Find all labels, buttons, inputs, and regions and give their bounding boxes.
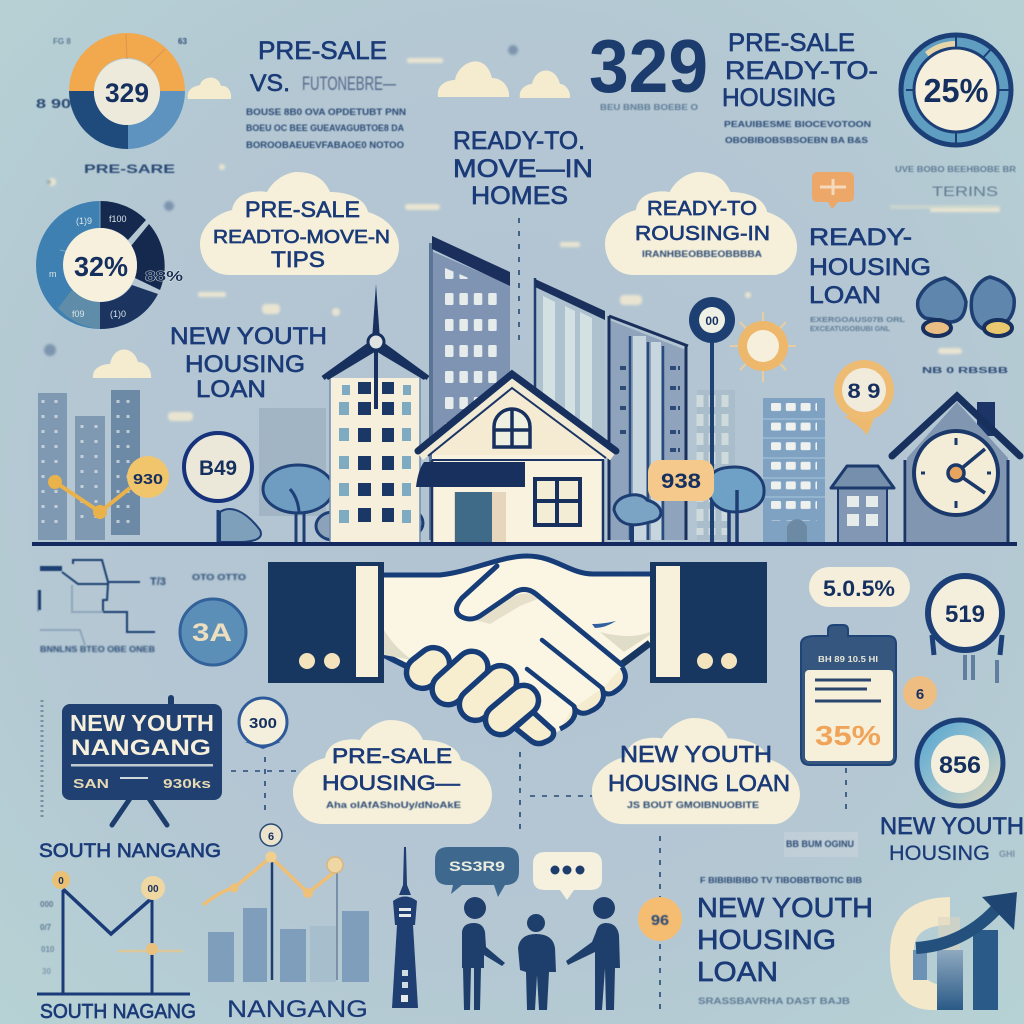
- heading: ready housing loan: HOUSING: [809, 254, 931, 281]
- person left: [462, 897, 505, 1010]
- right cuff: [650, 562, 767, 683]
- heading: pre-sale vs: [250, 37, 396, 97]
- donut chart: 32%: (1)0: [110, 309, 126, 319]
- cloud: pre-sale housing: [293, 720, 492, 824]
- heading: ready-to-move-in homes: [453, 127, 593, 210]
- heading: pre-sale vs: FUTONEBRE—: [302, 74, 396, 95]
- badge: 96: 96: [651, 912, 669, 929]
- heading: pre-sale ready-to housing: HOUSING: [722, 84, 836, 112]
- left hand fingers: [400, 641, 554, 744]
- badge: 96: [638, 897, 682, 941]
- right hand fingers: [527, 640, 625, 729]
- small label: NB 0 RBSBB: [922, 366, 1008, 375]
- badge: 300: [239, 698, 287, 749]
- heading: new youth housing loan bottom: [697, 876, 873, 1006]
- big number 329: BEU BNBB BOEBE O: [600, 103, 698, 112]
- building: tower with wind turbine: [323, 284, 428, 543]
- donut chart: 32%: f09: [72, 309, 85, 319]
- signboard: new youth nangang: NANGANG: [71, 735, 211, 760]
- line chart: gold trend: 930: [133, 471, 163, 488]
- heading: ready housing loan: LOAN: [809, 282, 881, 309]
- vertical tick strip: [40, 700, 44, 820]
- small label box: BB BUM OGINU: [786, 839, 854, 849]
- building: tall tower A: [429, 236, 510, 540]
- donut chart: 25%: [901, 35, 1011, 145]
- heading: new youth housing loan bottom: LOAN: [697, 956, 778, 987]
- pill badge: 939: [648, 460, 714, 501]
- dashed connectors: [231, 752, 846, 1010]
- heading: new youth housing loan: NEW YOUTH: [170, 323, 327, 350]
- cloud: ready-to housing-in: ROUSING-IN: [635, 223, 770, 245]
- donut chart: 32%: f100: [109, 214, 127, 224]
- building: small house: [831, 466, 894, 543]
- dashed connector: [518, 218, 520, 340]
- heading: new youth housing loan: [170, 323, 327, 403]
- badge: 300: 300: [249, 715, 277, 732]
- icon: abstract keys: [918, 277, 1014, 336]
- heading: ready housing loan: EXCEATUGOBUBI GNL: [810, 326, 891, 333]
- cloud: pre-sale tips: PRE-SALE: [245, 197, 360, 222]
- icon: observation tower: [392, 847, 418, 1008]
- donut chart: 32%: [36, 201, 183, 329]
- map diagram: OTO OTTO: [192, 573, 246, 582]
- pin badge: 89: [834, 360, 894, 436]
- line chart: south nangang: 0/7: [40, 923, 52, 932]
- badge: 3A: [180, 599, 246, 665]
- heading: pre-sale ready-to housing: PRE-SALE: [728, 29, 855, 57]
- building: faded background: [259, 408, 326, 516]
- donut chart: 329: [36, 33, 187, 149]
- pill badge: 939: 938: [661, 470, 701, 493]
- ground line: [32, 542, 1017, 546]
- badge: 6: [903, 676, 937, 710]
- cloud: new youth housing loan: HOUSING LOAN: [608, 770, 790, 796]
- heading: new youth housing right: HOUSING: [889, 842, 990, 865]
- signboard: new youth nangang: NEW YOUTH: [70, 710, 214, 736]
- text block: terms: TERINS: [932, 183, 998, 199]
- clipboard: 35%: 35%: [815, 720, 881, 751]
- icon: sun: [730, 312, 796, 382]
- pill: 5.0.5%: 5.0.5%: [823, 576, 895, 601]
- clipboard: 35%: BH 89 10.5 HI: [818, 655, 878, 664]
- map diagram: T/3: [150, 576, 166, 588]
- round attic window: [494, 409, 530, 447]
- main house: [416, 374, 616, 543]
- line chart: south nangang: 00: [147, 884, 159, 895]
- heading: ready housing loan: EXERGOAUS07B ORL: [810, 317, 906, 324]
- cloud: pre-sale tips: [200, 172, 399, 275]
- bar chart: nangang: [203, 824, 369, 982]
- building: faded mid tower: [697, 390, 735, 540]
- lollipop sign: 00: [705, 314, 719, 328]
- heading: new youth housing right: NEW YOUTH: [880, 813, 1024, 840]
- house with clock: [892, 396, 1020, 543]
- line chart: south nangang: [37, 871, 190, 994]
- speech bubble: blue: [435, 847, 519, 897]
- heading: nangang: NANGANG: [227, 996, 368, 1023]
- cloud: pre-sale tips: READTO-MOVE-N: [213, 227, 390, 247]
- trees: right group: [614, 467, 764, 543]
- donut chart: 32%: m: [49, 269, 56, 279]
- person middle: [518, 914, 556, 1010]
- bar chart: nangang: 6: [268, 831, 274, 843]
- badge: 6: 6: [916, 686, 924, 703]
- heading: pre-sale ready-to housing: PEAUIBESME BIOCEVOTOON: [724, 120, 871, 129]
- heading: south nagang: SOUTH NAGANG: [40, 1001, 196, 1023]
- heading: new youth housing right: GHI: [999, 849, 1015, 859]
- left cuff: [268, 562, 384, 683]
- cloud: pre-sale tips: TIPS: [271, 247, 325, 272]
- lollipop sign: [689, 297, 735, 543]
- heading: pre-sale vs: VS.: [250, 70, 290, 97]
- donut chart: 32%: 32%: [74, 251, 128, 282]
- signboard: new youth nangang: 930ks: [163, 776, 211, 791]
- line chart: south nangang: 010: [41, 945, 55, 954]
- line chart: gold trend: [48, 456, 169, 519]
- signboard: new youth nangang: [62, 695, 222, 825]
- line chart: south nangang: 30: [42, 967, 51, 976]
- map diagram: BNNLNS BTEO OBE ONEB: [40, 645, 155, 654]
- map diagram: [38, 560, 246, 654]
- heading: ready-to-move-in homes: HOMES: [471, 182, 568, 210]
- heading: new youth housing loan bottom: SRASSBAVRHA DAST BAJB: [698, 996, 851, 1006]
- gauge badge: 519: [928, 576, 1002, 683]
- text block: pre-sale details: BOUSE 8B0 OVA OPDETUBT PNN: [246, 107, 406, 117]
- small clouds: [93, 61, 570, 378]
- donut chart: 329: 329: [105, 78, 149, 108]
- signboard: new youth nangang: SAN: [73, 776, 109, 791]
- badge: 349: B49: [199, 457, 237, 480]
- donut chart: 856: [917, 720, 1003, 806]
- heading: new youth housing loan bottom: HOUSING: [697, 924, 836, 955]
- text block: terms: UVE BOBO BEEHBOBE BR: [895, 165, 1016, 174]
- text block: pre-sale details: BOROOBAEUEVFABAOE0 NOTOO: [246, 140, 404, 150]
- gauge badge: 519: 519: [945, 601, 985, 628]
- decorative specks: [48, 58, 1000, 421]
- donut chart: 856: 856: [939, 752, 981, 779]
- clipboard: 35%: [801, 625, 896, 765]
- text block: pre-sale details: [246, 107, 406, 150]
- label: pre-sale small: PRE-SARE: [84, 162, 175, 176]
- handshake: [268, 556, 767, 744]
- hands base: [384, 556, 650, 744]
- cloud: new youth housing loan: JS BOUT GMOIBNUOBITE: [627, 800, 759, 810]
- building: tower C: [609, 316, 688, 540]
- donut chart: 329: 63: [178, 37, 187, 46]
- trees: left group: [218, 465, 423, 543]
- donut chart: 329: FG 8: [53, 37, 71, 46]
- heading: pre-sale ready-to housing: READY-TO-: [725, 57, 878, 85]
- ground skyline: left faded towers: [38, 390, 140, 540]
- heading: south nangang: SOUTH NANGANG: [39, 841, 221, 862]
- marker: tiny icons: [44, 45, 518, 356]
- cloud: new youth housing loan: [592, 718, 800, 824]
- heading: pre-sale ready-to housing: [722, 29, 878, 145]
- donut chart: 32%: (1)9: [76, 216, 92, 226]
- cloud: ready-to housing-in: [605, 172, 797, 275]
- cloud: pre-sale housing: Aha olAfAShoUy/dNoAkE: [326, 800, 461, 810]
- speech bubble: cream with dots: [533, 852, 602, 900]
- heading: pre-sale ready-to housing: OBOBIBOBSBSOEBN BA B&S: [725, 136, 869, 145]
- heading: ready-to-move-in homes: MOVE—IN: [453, 155, 593, 183]
- donut chart: 329: 8 90: [36, 96, 71, 111]
- big number 329: 329: [589, 24, 708, 108]
- small label box: [784, 832, 858, 857]
- heading: new youth housing loan bottom: F BIBIBIBIBO TV TIBOBBTBOTIC BIB: [700, 876, 862, 885]
- heading: ready housing loan: [809, 224, 931, 333]
- badge: 349: [184, 433, 252, 501]
- line chart: south nangang: 000: [40, 900, 54, 909]
- pin badge: 89: 8 9: [848, 380, 880, 403]
- speech bubble: blue: SS3R9: [449, 858, 505, 874]
- donut chart: 25%: 25%: [924, 72, 988, 109]
- donut chart: 32%: 88%: [145, 268, 183, 285]
- building: blue apartment: [763, 398, 825, 543]
- square window: [535, 479, 580, 525]
- heading: ready housing loan: READY-: [809, 224, 912, 251]
- cloud: pre-sale housing: HOUSING—: [322, 772, 460, 795]
- cloud: new youth housing loan: NEW YOUTH: [620, 741, 772, 767]
- awning: [416, 462, 525, 487]
- people talking: [462, 897, 620, 1010]
- heading: new youth housing loan: HOUSING: [185, 351, 305, 378]
- thumb: [456, 566, 622, 665]
- heading: new youth housing loan: LOAN: [196, 376, 266, 403]
- person right: [566, 897, 620, 1010]
- text block: pre-sale details: BOEU OC BEE GUEAVAGUBTOE8 DA: [246, 123, 404, 133]
- cloud: ready-to housing-in: READY-TO: [647, 198, 757, 220]
- text block: terms: [890, 165, 1016, 209]
- growth chart with arrow: [890, 892, 1017, 1010]
- cloud: pre-sale housing: PRE-SALE: [332, 745, 452, 768]
- building: tower B: [535, 278, 605, 540]
- line chart: south nangang: 0: [58, 876, 64, 887]
- pill: 5.0.5%: [809, 567, 910, 607]
- cloud: ready-to housing-in: IRANHBEOBBEOBBBBA: [642, 249, 763, 259]
- heading: new youth housing loan bottom: NEW YOUTH: [697, 892, 873, 923]
- door: [454, 492, 506, 543]
- heading: pre-sale vs: PRE-SALE: [258, 37, 387, 65]
- badge: 3A: 3A: [192, 619, 232, 647]
- heading: ready-to-move-in homes: READY-TO.: [453, 127, 585, 155]
- heading: new youth housing right: [880, 813, 1024, 865]
- icon: orange speech bubble: [812, 172, 854, 209]
